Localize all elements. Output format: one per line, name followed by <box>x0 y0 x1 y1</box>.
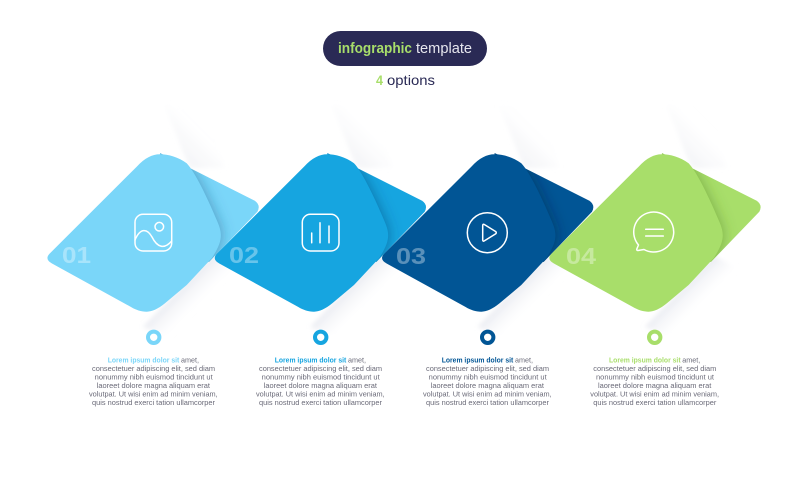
marker dot 3 <box>482 332 493 343</box>
icon: speech bubble <box>634 212 674 252</box>
marker dot 4 <box>649 332 660 343</box>
back fold: option 2 <box>327 153 426 262</box>
text block 2: Lorem ipsum dolor sit <box>275 356 347 364</box>
text block 2: quis nostrud exerci tation ullamcorper <box>259 398 383 407</box>
marker dot 2 <box>315 332 326 343</box>
text block 4: quis nostrud exerci tation ullamcorper <box>593 398 717 407</box>
text block 2: amet, <box>348 356 366 364</box>
text block 1: Lorem ipsum dolor sit <box>108 356 180 364</box>
title pill: template <box>416 41 472 57</box>
subtitle: 4 <box>376 72 383 88</box>
diamond: option 4 <box>549 154 723 312</box>
icon: play <box>467 213 507 253</box>
text block 1: volutpat. Ut wisi enim ad minim veniam, <box>89 390 218 398</box>
number 03: 03 <box>396 243 426 269</box>
text block 1: consectetuer adipiscing elit, sed diam <box>92 364 215 373</box>
diamond: option 2 <box>215 154 388 312</box>
number 02: 02 <box>229 242 259 268</box>
text block 2: consectetuer adipiscing elit, sed diam <box>259 364 382 373</box>
text block 3: quis nostrud exerci tation ullamcorper <box>426 398 550 407</box>
text block 1: quis nostrud exerci tation ullamcorper <box>92 398 216 407</box>
text block 4: laoreet dolore magna aliquam erat <box>598 381 711 390</box>
text block 3: nonummy nibh euismod tincidunt ut <box>429 372 547 382</box>
text block 3 <box>423 356 552 407</box>
text block 3: laoreet dolore magna aliquam erat <box>431 381 544 390</box>
text block 1: amet, <box>181 356 199 364</box>
icon: image <box>135 214 172 251</box>
diamond: option 1 <box>47 154 221 312</box>
text block 1: laoreet dolore magna aliquam erat <box>97 381 210 390</box>
text block 2: nonummy nibh euismod tincidunt ut <box>262 372 380 382</box>
text block 3: volutpat. Ut wisi enim ad minim veniam, <box>423 390 552 398</box>
title pill: infographic <box>338 41 412 57</box>
back fold: option 3 <box>494 153 594 262</box>
text block 2 <box>256 356 385 407</box>
subtitle: options <box>387 72 435 88</box>
text block 4 <box>590 356 719 407</box>
text block 3: consectetuer adipiscing elit, sed diam <box>426 364 549 373</box>
diamond: option 3 <box>382 154 555 312</box>
number 01: 01 <box>62 242 91 268</box>
back fold: option 1 <box>160 153 259 262</box>
icon: bar chart <box>302 214 339 251</box>
text block 2: volutpat. Ut wisi enim ad minim veniam, <box>256 390 385 398</box>
number 04: 04 <box>566 243 596 269</box>
text block 4: consectetuer adipiscing elit, sed diam <box>593 364 716 373</box>
text block 1 <box>89 356 218 407</box>
text block 3: amet, <box>515 356 533 364</box>
text block 1: nonummy nibh euismod tincidunt ut <box>95 372 213 382</box>
text block 4: amet, <box>682 356 700 364</box>
text block 4: volutpat. Ut wisi enim ad minim veniam, <box>590 390 719 398</box>
text block 3: Lorem ipsum dolor sit <box>442 356 514 364</box>
back fold: option 4 <box>662 153 761 262</box>
marker dot 1 <box>148 332 159 343</box>
text block 4: Lorem ipsum dolor sit <box>609 356 681 364</box>
text block 2: laoreet dolore magna aliquam erat <box>264 381 377 390</box>
title pill <box>323 31 487 66</box>
long shadows behind the shapes <box>143 105 738 338</box>
text block 4: nonummy nibh euismod tincidunt ut <box>596 372 714 382</box>
